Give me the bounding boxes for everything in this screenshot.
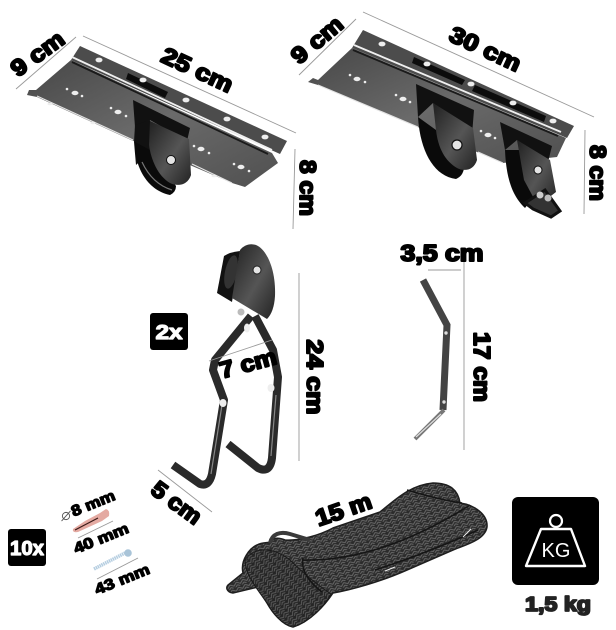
label: 7 cm: 7 cm (217, 343, 279, 383)
label: 15 m: 15 m (312, 488, 375, 531)
lower-left coil (245, 550, 331, 627)
badge: 2x (150, 313, 188, 350)
first pulley housing (416, 84, 474, 135)
label: 43 mm: 43 mm (92, 561, 152, 599)
first axle hole (452, 140, 462, 150)
seams (302, 490, 478, 592)
first pulley wheel (418, 117, 464, 179)
bracket 25 cm: upper flange (71, 46, 287, 154)
bracket 30 cm: upper flange (352, 30, 574, 138)
weight icon (512, 497, 599, 585)
panel: 25 cm bracket (27, 46, 287, 195)
label: 8 mm: 8 mm (69, 487, 118, 520)
mounting holes (349, 42, 556, 139)
label: 8 cm left: 8 cm (295, 160, 321, 216)
panel: 30 cm bracket (308, 30, 574, 217)
strap (423, 280, 447, 410)
hook axle hole (253, 266, 261, 274)
pulley axle hole (166, 156, 176, 164)
hook pulley plate (232, 244, 275, 319)
rope outline (227, 483, 487, 627)
label: 17 cm: 17 cm (469, 332, 495, 402)
weight icon: KG (542, 540, 570, 562)
second pulley clamp and bolts (525, 190, 560, 217)
label: 24 cm: 24 cm (302, 340, 328, 414)
label: 9 cm left: 9 cm (5, 25, 69, 82)
second pulley wheel (505, 150, 535, 208)
label: 25 cm: 25 cm (157, 42, 237, 98)
second pulley housing (500, 122, 552, 162)
screw (94, 553, 125, 569)
strap holes (444, 331, 448, 335)
hook bolts (238, 308, 244, 316)
hook pulley block (217, 251, 240, 302)
loop (270, 533, 310, 543)
badge: 10x (8, 529, 46, 566)
first pulley plate (433, 103, 477, 170)
bracket 30 cm: base plate (308, 48, 566, 163)
panel: narrow bent bracket (415, 280, 448, 439)
label: weight 1,5 kg: 1,5 kg (525, 594, 591, 616)
pulley housing (133, 100, 190, 141)
diameter symbol (59, 510, 73, 522)
badge: 2x: 2x (156, 322, 182, 344)
panel: hook (173, 244, 278, 485)
second pulley plate (517, 140, 556, 206)
second pulley axle hole (534, 166, 542, 174)
wall plug and screw set (59, 487, 152, 599)
label: 8 cm right: 8 cm (585, 145, 611, 201)
hook frame (173, 316, 251, 485)
wall plug (73, 509, 109, 532)
label: 5 cm: 5 cm (146, 476, 207, 530)
bracket 25 cm: base plate (27, 60, 278, 187)
badge: 10x: 10x (10, 538, 44, 560)
label: 3,5 cm: 3,5 cm (400, 240, 484, 266)
pulley wheel (135, 142, 176, 195)
mounting holes (48, 58, 268, 177)
pulley plate (149, 121, 191, 185)
label: 9 cm right: 9 cm (286, 11, 348, 69)
label: 40 mm: 40 mm (71, 520, 131, 558)
label: 30 cm: 30 cm (445, 21, 525, 77)
rope coil (227, 483, 487, 627)
